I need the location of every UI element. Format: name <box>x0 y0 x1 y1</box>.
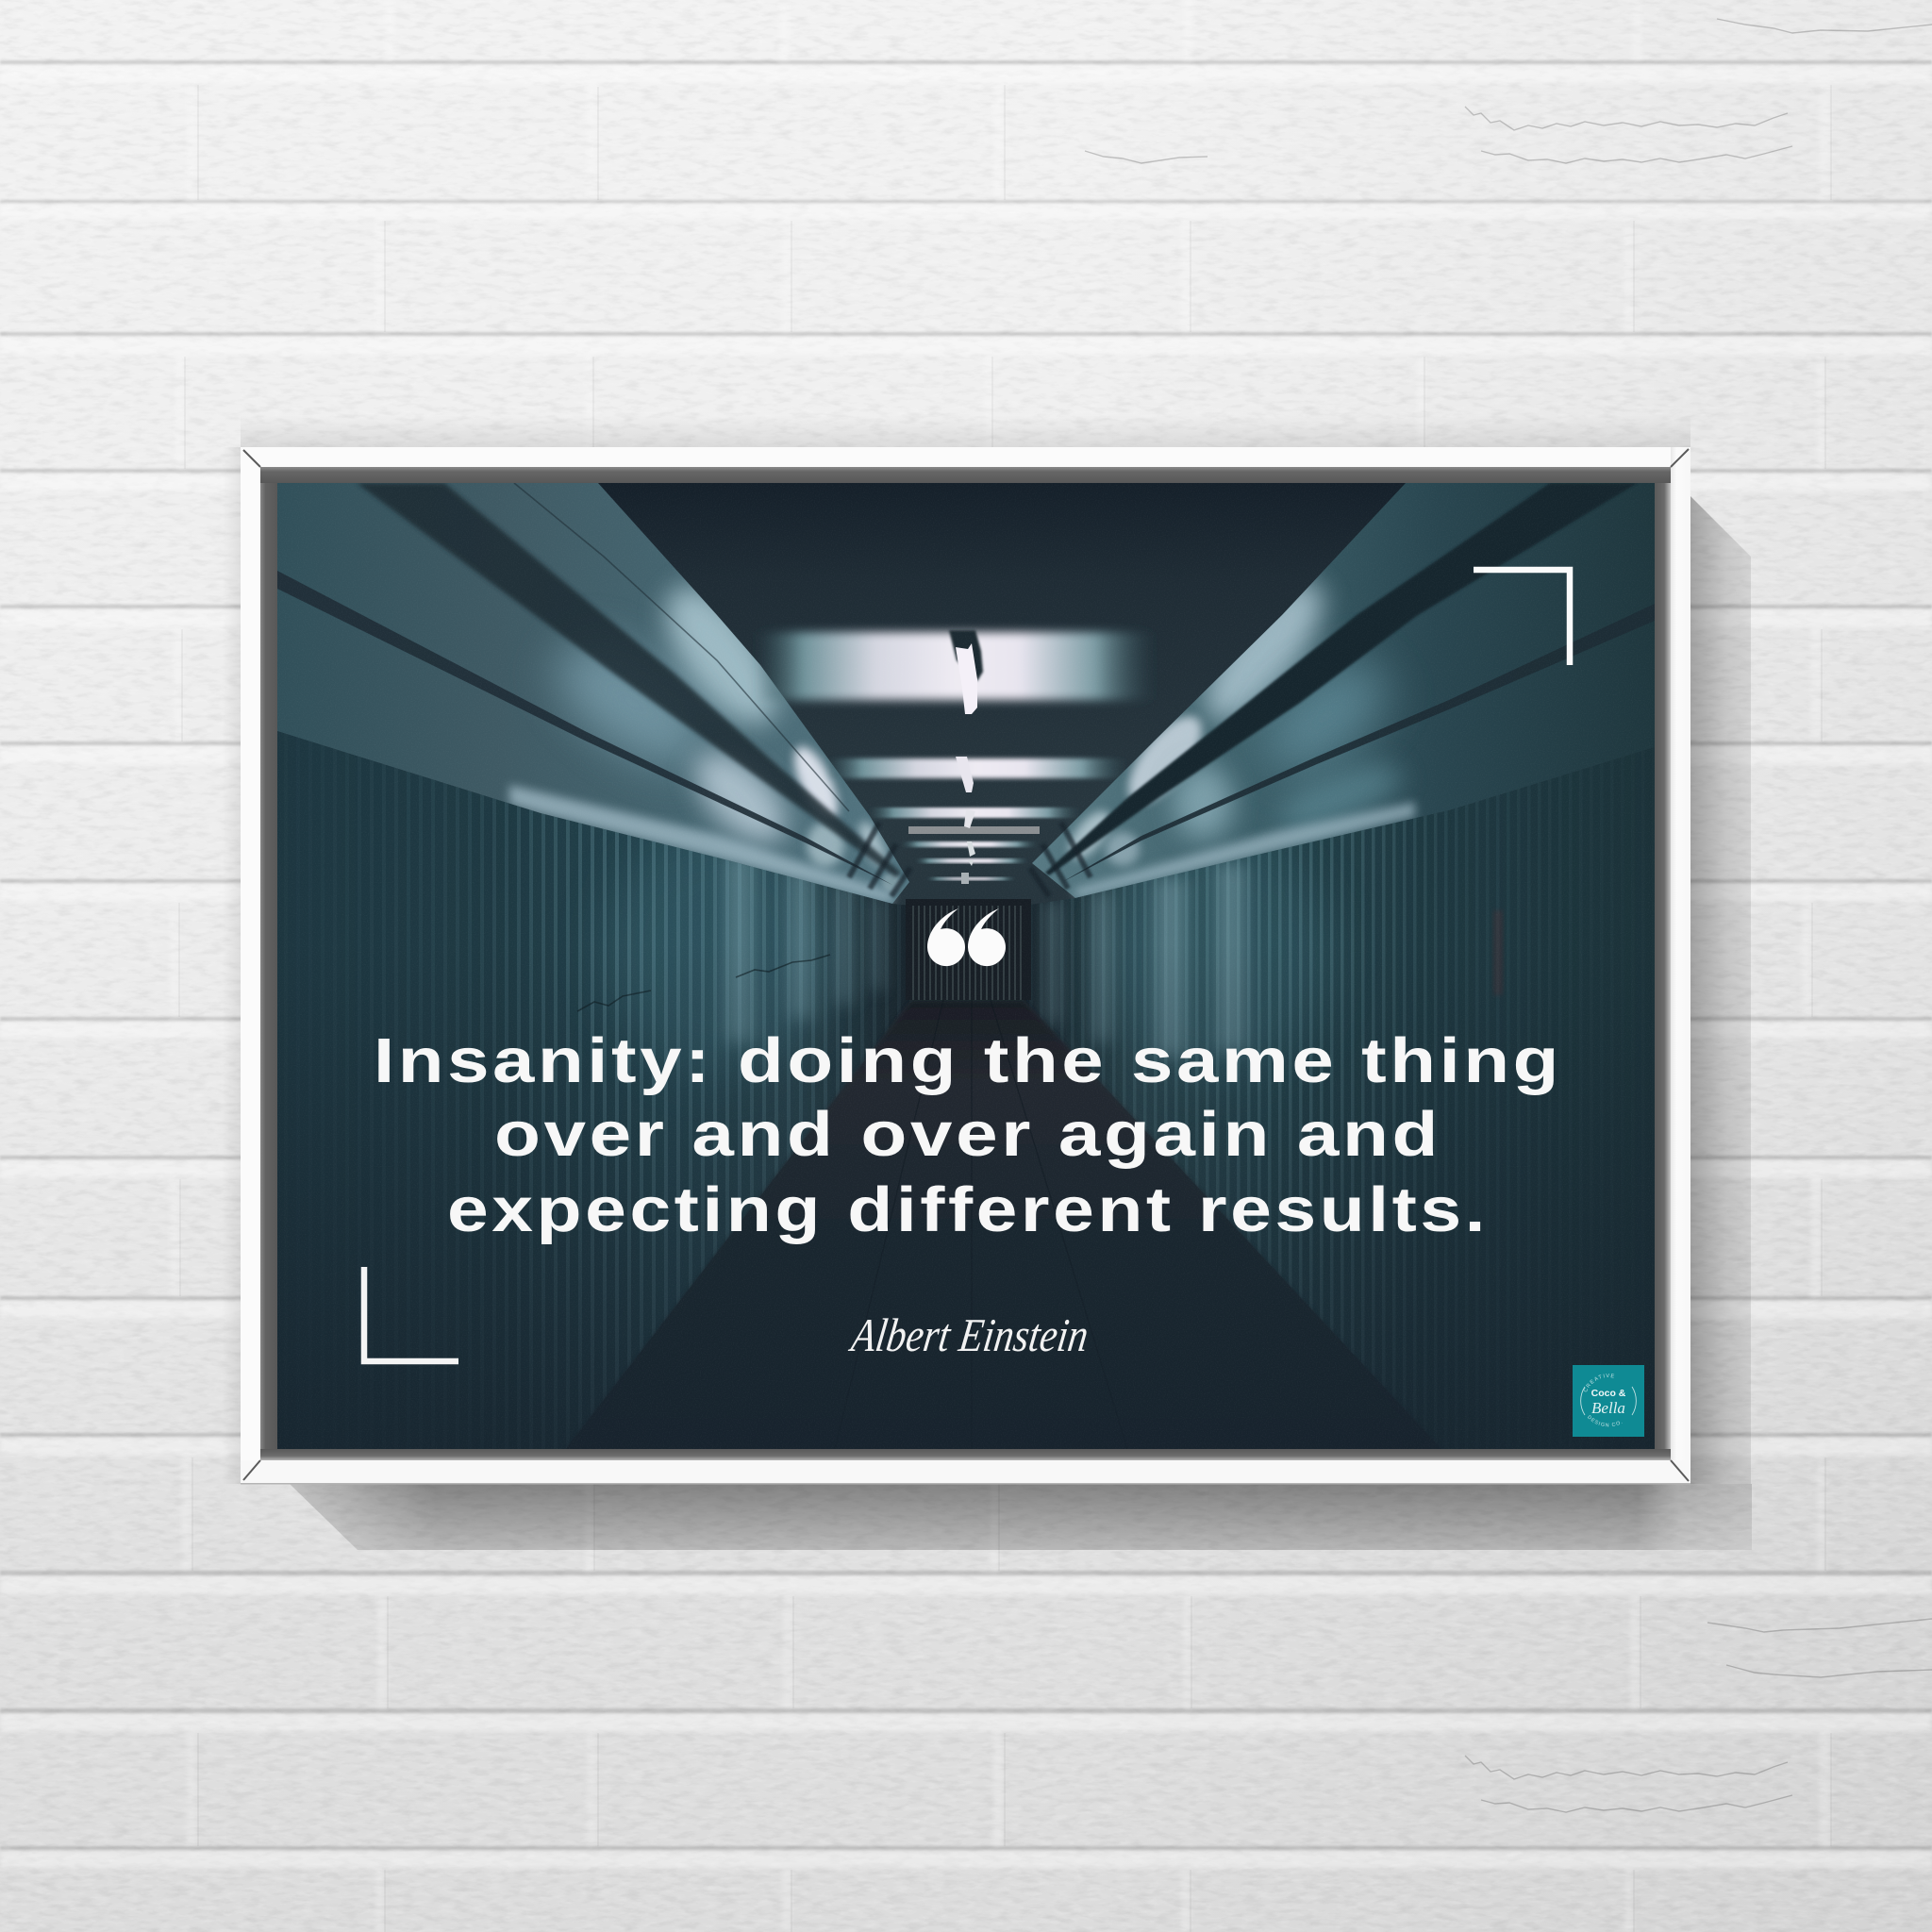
corner bracket: bottom left <box>364 1267 458 1361</box>
right end ribs <box>1030 823 1091 896</box>
quote text <box>374 1025 1562 1245</box>
grain overlay <box>277 483 1655 1449</box>
icon: quotation marks <box>927 908 1006 966</box>
logo badge: Bella <box>1591 1399 1625 1417</box>
left wall cap highlight <box>509 785 892 904</box>
white picture frame <box>241 447 1690 1485</box>
left thin crack line <box>514 483 849 811</box>
logo badge: Coco & <box>1591 1388 1626 1399</box>
left ceiling beams <box>277 483 910 904</box>
logo badge <box>1573 1365 1644 1437</box>
left dark groove <box>357 483 901 877</box>
right corrugated wall <box>1019 717 1660 1453</box>
ceiling lights <box>755 630 1156 884</box>
logo badge: CREATIVE <box>1583 1374 1615 1392</box>
attribution signature: Albert Einstein <box>846 1308 1091 1361</box>
quote text: over and over again and <box>494 1099 1441 1170</box>
tunnel floor <box>566 1000 1441 1449</box>
right ceiling beams <box>1030 483 1655 898</box>
left dark line <box>277 571 892 885</box>
right wall cap highlight <box>1075 802 1415 898</box>
tunnel end wall <box>906 899 1031 1000</box>
quote text: Insanity: doing the same thing <box>374 1025 1562 1096</box>
poster photo: tunnel <box>277 483 1660 1453</box>
left corrugated wall <box>277 717 919 1453</box>
left end ribs <box>849 823 910 896</box>
frame drop shadow on wall <box>222 415 1752 1550</box>
bottom shading <box>277 943 1655 1449</box>
corner bracket: top right <box>1474 570 1570 665</box>
logo badge: DESIGN CO. <box>1587 1415 1623 1426</box>
quote text: expecting different results. <box>447 1174 1489 1245</box>
tunnel ceiling <box>277 483 1655 1449</box>
right dark line <box>1062 604 1655 882</box>
right dark groove <box>1045 483 1638 875</box>
